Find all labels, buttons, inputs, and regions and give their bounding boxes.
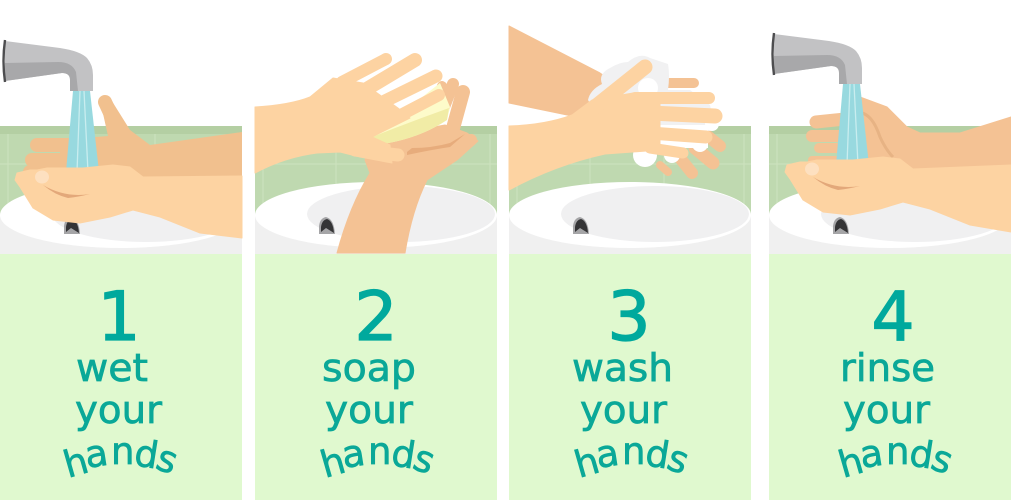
icon: back hand [30, 98, 242, 180]
label: wet your hands: your [75, 388, 162, 432]
icon: running water [66, 91, 99, 172]
label: soap your hands: your [325, 388, 413, 432]
label: wash your hands: your [580, 388, 667, 432]
label: wet your hands: hands [59, 430, 184, 487]
thumb crease and nail [805, 162, 860, 190]
label: rinse your hands: your [843, 388, 930, 432]
icon: soap foam [588, 56, 719, 167]
label: soap your hands [316, 346, 441, 487]
icon: front hand [785, 157, 1011, 232]
icon: back hands [812, 97, 1011, 172]
label: soap your hands: hands [316, 430, 441, 487]
crease of lower palm [407, 134, 465, 155]
icon: front hand [15, 165, 242, 238]
step number 2: 2 [354, 278, 398, 357]
panel: step 3 wash your hands [509, 26, 751, 500]
icon: lower arm and fingers [509, 26, 720, 173]
icon: front hand with fingers spread [509, 67, 715, 190]
label: wash your hands: wash [572, 346, 673, 390]
icon: lower hand holding soap [337, 84, 478, 253]
icon: upper hand [255, 59, 439, 173]
icon: soap bar [372, 83, 450, 144]
step number 1: 1 [97, 278, 141, 357]
label: wash your hands: hands [570, 430, 695, 487]
label: soap your hands: soap [322, 346, 416, 390]
crease between hands [862, 113, 893, 157]
label: wet your hands [59, 346, 184, 487]
panel: step 1 wet your hands [0, 40, 242, 500]
label: wet your hands: wet [76, 346, 148, 390]
label: rinse your hands: hands [834, 430, 959, 487]
icon: running water [836, 84, 869, 165]
icon: faucet [4, 40, 93, 91]
label: rinse your hands [834, 346, 959, 487]
icon: faucet [772, 33, 862, 84]
step number 4: 4 [871, 278, 915, 357]
panel: step 4 rinse your hands [769, 33, 1011, 500]
label: rinse your hands: rinse [840, 346, 935, 390]
label: wash your hands [570, 346, 695, 487]
step number 3: 3 [607, 278, 651, 357]
panel: step 2 soap your hands [255, 59, 497, 500]
